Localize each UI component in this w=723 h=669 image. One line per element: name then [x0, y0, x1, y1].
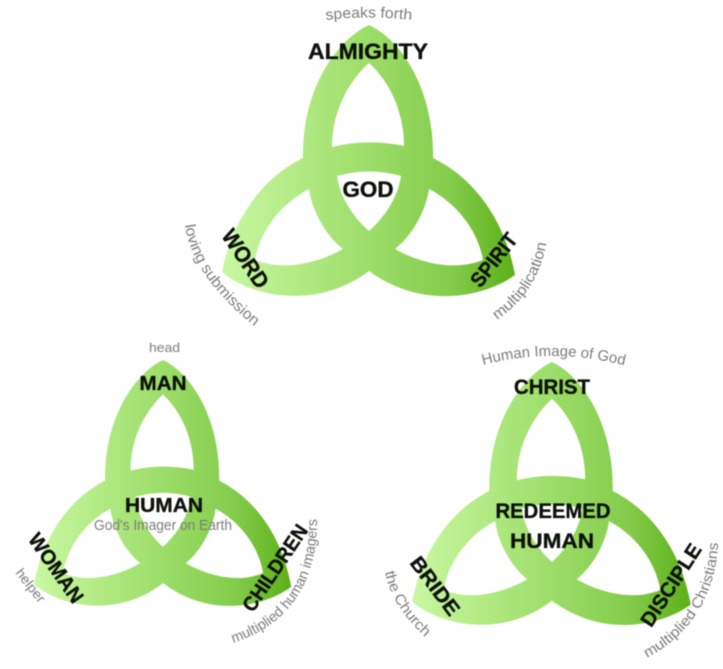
label: multiplied human imagers: multiplied human imagers	[231, 519, 320, 643]
label: helper: helper	[13, 566, 49, 606]
label: WOMAN: WOMAN	[23, 529, 88, 608]
label: CHILDREN: CHILDREN	[238, 520, 313, 616]
label: DISCIPLE: DISCIPLE	[636, 540, 707, 631]
label: SPIRIT: SPIRIT	[466, 229, 523, 292]
label: multiplied Christians: multiplied Christians	[644, 542, 719, 658]
label: multiplication: multiplication	[492, 242, 547, 320]
diagram: God triquetra	[184, 6, 547, 326]
label: REDEEMED: REDEEMED	[496, 500, 610, 523]
label: CHRIST: CHRIST	[514, 376, 590, 399]
label: HUMAN: HUMAN	[510, 530, 594, 553]
label: Human Image of God: Human Image of God	[481, 346, 626, 366]
shape: top triquetra knot	[222, 25, 515, 296]
label: God's Imager on Earth: God's Imager on Earth	[94, 518, 232, 534]
shape: lower-left triquetra knot	[34, 360, 291, 606]
shape: lower-right triquetra knot	[412, 362, 691, 625]
label: head: head	[149, 340, 180, 355]
label: the Church: the Church	[384, 570, 430, 637]
label: HUMAN: HUMAN	[125, 494, 203, 517]
label: GOD: GOD	[342, 177, 394, 202]
label: loving submission: loving submission	[184, 224, 259, 326]
label: ALMIGHTY: ALMIGHTY	[308, 39, 428, 64]
diagram: Human triquetra	[13, 340, 320, 643]
label: BRIDE: BRIDE	[405, 552, 464, 620]
label: MAN: MAN	[140, 372, 186, 395]
diagram: Redeemed Human triquetra	[384, 346, 719, 658]
label: speaks forth: speaks forth	[326, 6, 412, 23]
label: WORD: WORD	[217, 224, 274, 293]
